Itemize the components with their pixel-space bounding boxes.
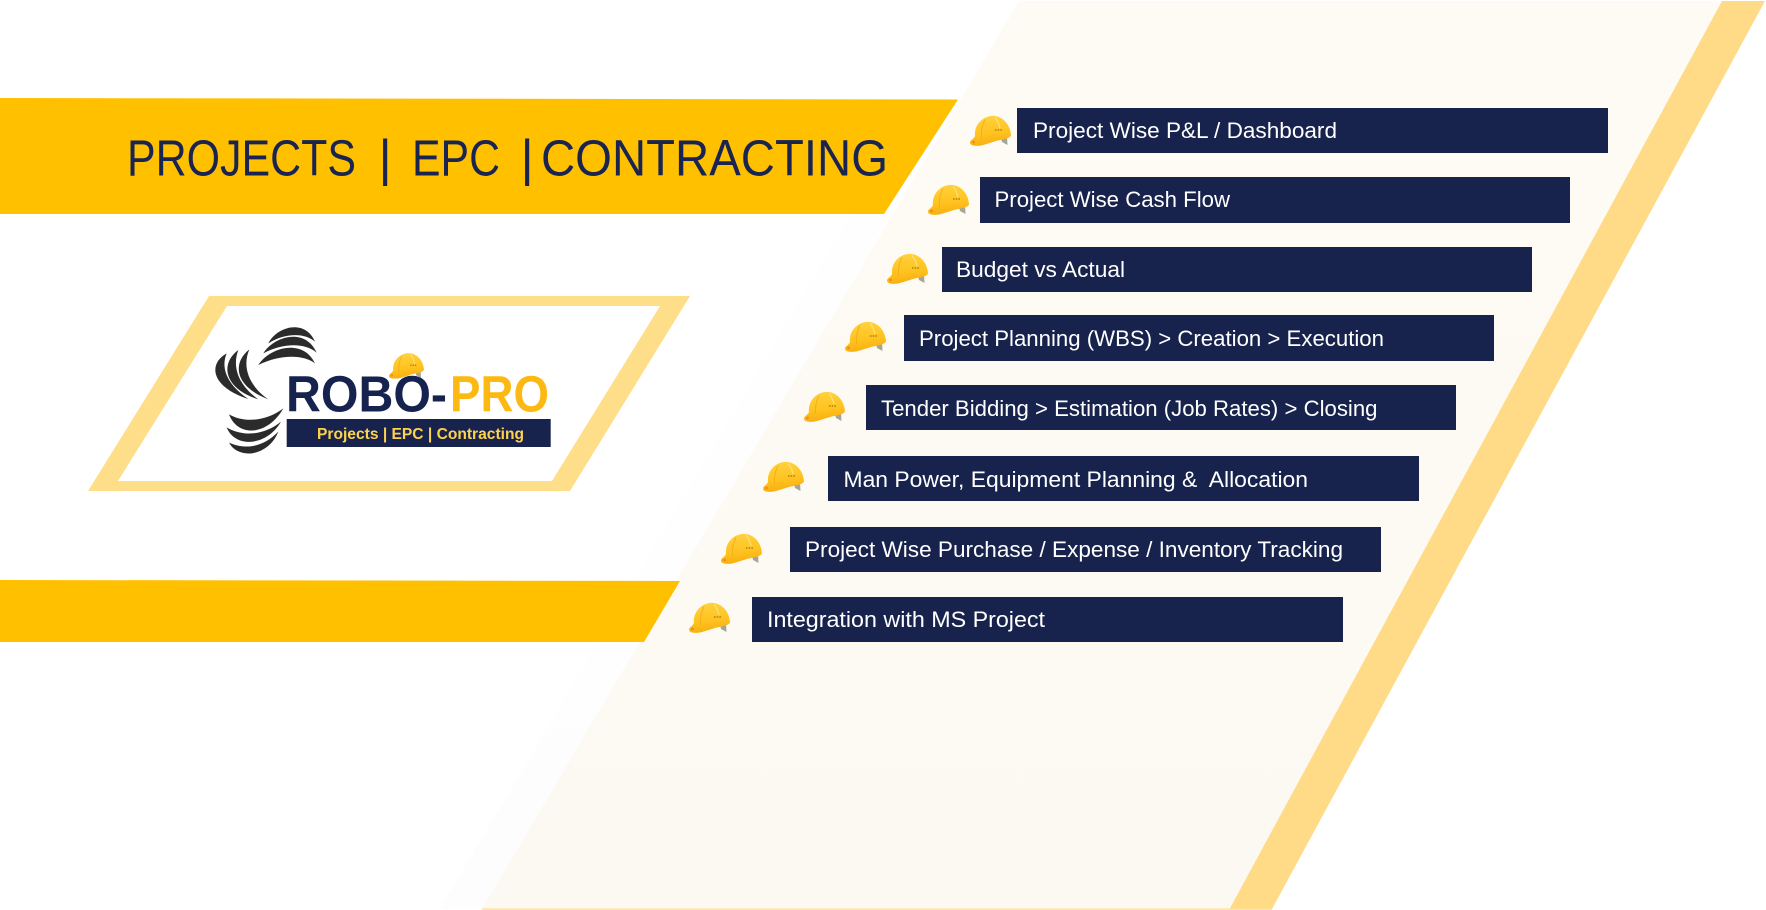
icon: helmet	[763, 462, 804, 492]
panel: cream feature parallelogram	[482, 1, 1722, 909]
icon: helmet	[887, 254, 928, 284]
feature 2	[928, 177, 1570, 223]
icon: logo helmet	[389, 353, 424, 379]
icon: helmet	[845, 322, 886, 352]
icon: helmet	[804, 392, 845, 422]
title: CONTRACTING	[541, 130, 888, 187]
feature 5	[804, 385, 1456, 430]
bar: MS Project: Integration with MS Project	[767, 607, 1046, 632]
title: |	[520, 130, 534, 187]
bar: Project Wise P&L	[1017, 108, 1608, 153]
logo tagline bar	[287, 419, 551, 447]
bar: Tender Bidding	[866, 385, 1456, 430]
panel: logo frame	[88, 296, 690, 491]
panel: gold diagonal band	[1230, 1, 1765, 909]
icon: helmet	[721, 534, 762, 564]
bar: Cash Flow	[980, 177, 1570, 223]
title: PROJECTS	[127, 130, 356, 187]
feature 3	[887, 247, 1532, 292]
bar: Man Power: Man Power, Equipment Planning & Allocation	[844, 467, 1308, 492]
bar: Man Power	[828, 456, 1419, 501]
bar: Tender Bidding: Tender Bidding > Estimation (Job Rates) > Closing	[881, 396, 1378, 421]
bar: Project Wise P&L: Project Wise P&L / Dashboard	[1033, 118, 1337, 143]
bar: Cash Flow: Project Wise Cash Flow	[994, 187, 1231, 212]
icon: helmet	[689, 603, 730, 633]
feature 4	[845, 315, 1494, 361]
logo wordmark: PRO: PRO	[450, 366, 549, 422]
panel: faint shadow beside feature panel	[440, 0, 1019, 909]
bar: Project Planning	[904, 315, 1494, 361]
heading banner	[0, 98, 958, 214]
title: |	[378, 130, 392, 187]
icon: helmet	[970, 116, 1011, 146]
logo: Robo-Pro	[215, 327, 551, 453]
gold baseline of feature panel	[482, 908, 1272, 910]
feature 7	[721, 527, 1381, 572]
icon: helmet	[928, 185, 969, 215]
lower gold banner	[0, 580, 680, 642]
bar: MS Project	[752, 597, 1343, 642]
logo wordmark: ROBO-: ROBO-	[286, 366, 447, 422]
bar: Purchase tracking: Project Wise Purchase / Expense / Inventory Tracking	[805, 537, 1343, 562]
bar: Budget vs Actual: Budget vs Actual	[956, 257, 1125, 282]
logo tagline text: Projects | EPC | Contracting	[317, 426, 524, 443]
feature 8	[689, 597, 1343, 642]
bar: Purchase tracking	[790, 527, 1381, 572]
bar: Budget vs Actual	[942, 247, 1532, 292]
title: EPC	[412, 130, 500, 187]
feature 1	[970, 108, 1608, 153]
logo swirl	[215, 327, 317, 453]
title	[127, 130, 888, 187]
bar: Project Planning: Project Planning (WBS) > Creation > Execution	[919, 326, 1384, 351]
feature 6	[763, 456, 1419, 501]
